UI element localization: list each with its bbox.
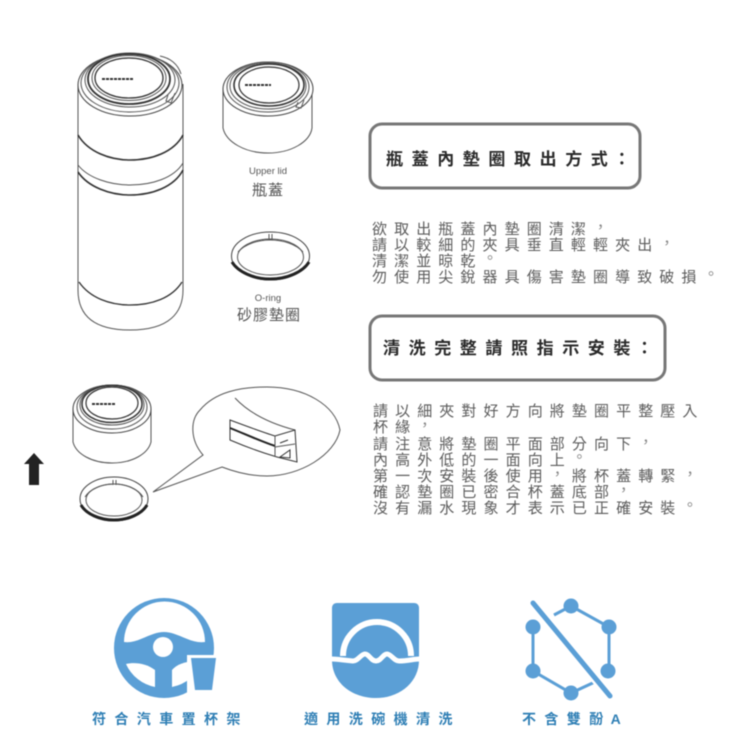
- text block: removal steps: ，: [593, 219, 615, 236]
- illustration: lower o-ring: [80, 477, 148, 521]
- text block: installation steps: 將杯蓋轉緊: [572, 468, 682, 485]
- text block: installation steps: 請注意將墊圈平面部分向下: [373, 436, 638, 453]
- text block: installation steps: 請以細夾對好方向將墊圈平整壓入: [373, 403, 705, 420]
- text block: installation steps: ，: [616, 482, 638, 499]
- text block: installation steps: 。: [682, 497, 705, 514]
- text block: removal steps: [372, 219, 726, 286]
- illustration: o-ring: [232, 232, 310, 280]
- icon: BPA free: [526, 598, 616, 700]
- text block: removal steps: 勿使用尖銳器具傷害墊圈導致破損: [372, 269, 704, 286]
- caption: upper lid: Upper lid: [249, 166, 287, 177]
- text block: removal steps: 請以較細的夾具垂直輕輕夾出: [372, 237, 659, 254]
- text block: installation steps: 第一次安裝後使用: [373, 468, 550, 485]
- icon: up arrow: [24, 453, 44, 485]
- icon: steering wheel with cup: [114, 598, 219, 698]
- text block: installation steps: 。: [572, 449, 594, 466]
- panel: installation heading: [370, 316, 665, 380]
- caption: o-ring: [237, 293, 301, 324]
- label: dishwasher safe: 適用洗碗機清洗: [304, 711, 461, 727]
- caption: upper lid: [249, 166, 287, 199]
- text block: installation steps: ，: [417, 417, 439, 434]
- text block: installation steps: ，: [550, 466, 572, 483]
- panel: removal heading: 瓶蓋內墊圈取出方式：: [386, 149, 639, 169]
- text block: installation steps: 杯緣: [373, 419, 417, 436]
- text block: installation steps: 沒有漏水現象才表示已正確安裝: [373, 500, 682, 517]
- text block: removal steps: 。: [483, 250, 505, 267]
- illustration: lid above o-ring: [73, 385, 151, 463]
- text block: removal steps: ，: [659, 235, 681, 252]
- text block: removal steps: 清潔並晾乾: [372, 253, 483, 270]
- label: car cup holder: 符合汽車置杯架: [92, 711, 249, 727]
- label: BPA free: 不含雙酚A: [522, 711, 629, 727]
- icon: dishwasher: [332, 603, 419, 698]
- callout: o-ring cross-section: [153, 387, 340, 492]
- text block: removal steps: 。: [704, 266, 726, 283]
- text block: installation steps: ，: [682, 466, 705, 483]
- illustration: upper lid: [223, 62, 313, 153]
- caption: o-ring: O-ring: [255, 293, 281, 304]
- text block: installation steps: 確認墊圈已密合杯蓋底部: [373, 484, 616, 501]
- text block: removal steps: 欲取出瓶蓋內墊圈清潔: [372, 221, 593, 238]
- caption: o-ring: 砂膠墊圈: [237, 307, 301, 324]
- text block: installation steps: ，: [638, 434, 660, 451]
- text block: installation steps: [373, 403, 705, 517]
- panel: removal heading: [370, 124, 640, 188]
- panel: installation heading: 清洗完整請照指示安裝：: [383, 338, 662, 358]
- illustration: full bottle: [78, 53, 183, 330]
- text block: installation steps: 內高外低的一面向上: [373, 452, 572, 469]
- caption: upper lid: 瓶蓋: [252, 182, 284, 199]
